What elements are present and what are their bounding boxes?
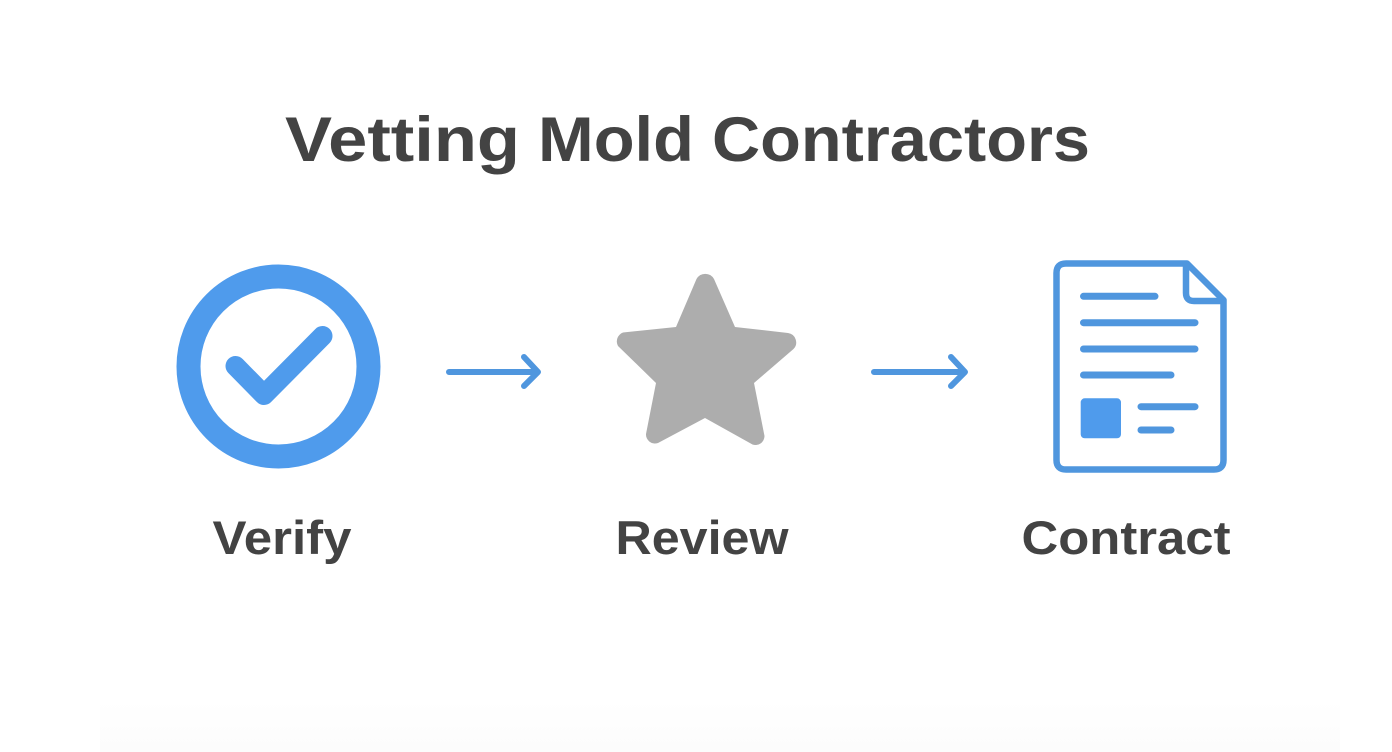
icon: verify check circle [188, 276, 368, 456]
arrow: verify to review [449, 357, 538, 386]
label: review: Review [616, 511, 789, 564]
title: Vetting [285, 105, 520, 175]
label: verify: Verify [212, 511, 352, 564]
title: Mold [538, 105, 694, 175]
title: Contractors [712, 105, 1090, 175]
label: contract: Contract [1022, 511, 1231, 564]
icon: contract document [1056, 264, 1224, 470]
arrow: review to contract [874, 357, 965, 386]
icon: review star [617, 274, 796, 445]
